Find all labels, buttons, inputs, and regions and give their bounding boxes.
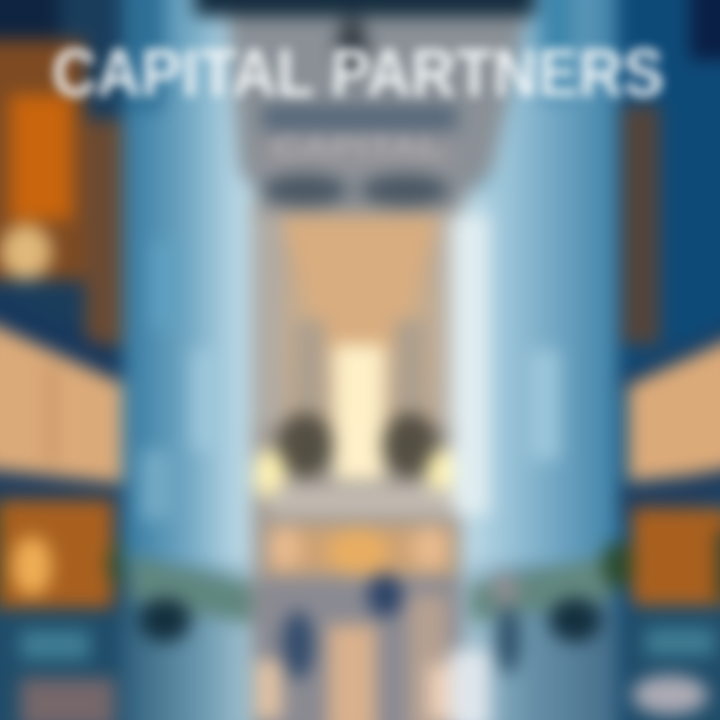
panel: left glass tower	[122, 0, 257, 570]
panel: left reflecting floor	[122, 555, 258, 720]
title: CAPITAL PARTNERS	[52, 35, 664, 111]
central light shaft	[334, 345, 384, 480]
panel: ceiling funnel	[195, 0, 535, 212]
panel: central reflecting floor	[255, 573, 465, 720]
panel: right building	[602, 0, 720, 720]
panel: left building	[0, 0, 143, 720]
panel: right reflecting floor	[450, 555, 622, 720]
panel: right glass tower	[452, 0, 622, 570]
subtitle: CAPITAL	[273, 132, 443, 162]
panel: central hall	[252, 200, 468, 720]
